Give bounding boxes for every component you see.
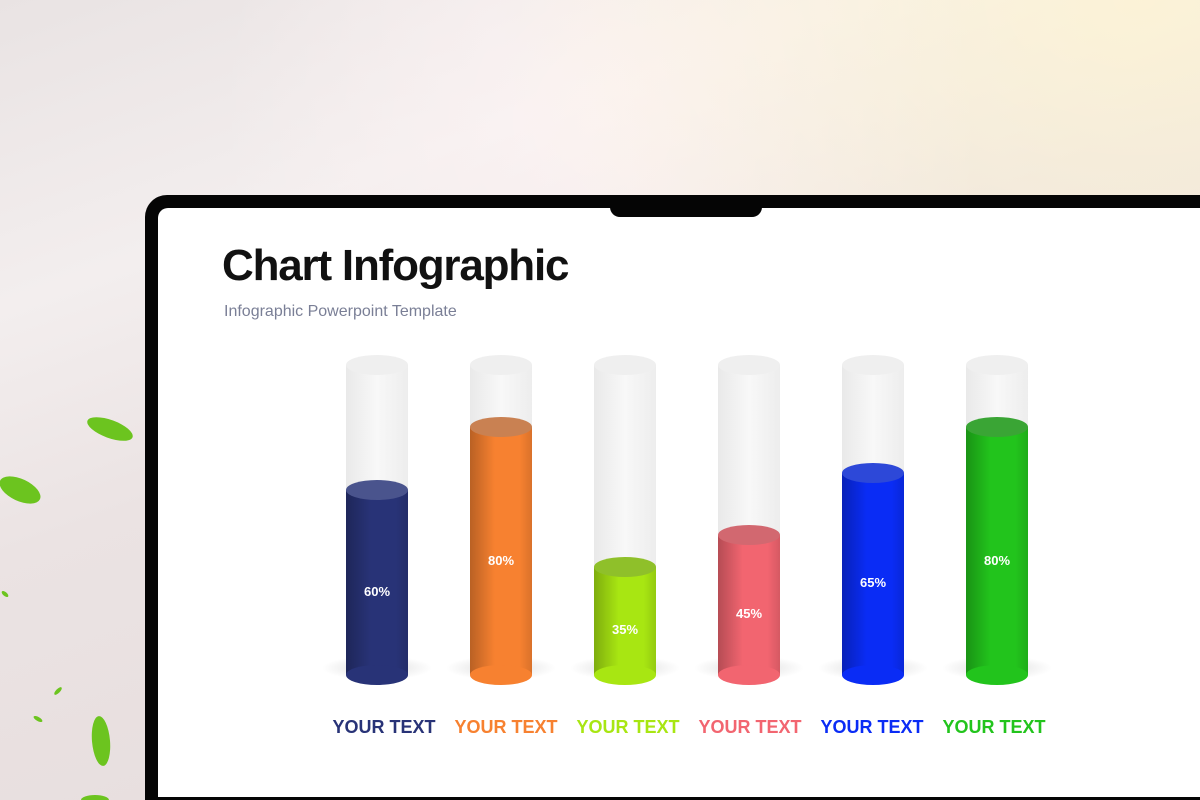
bar chart [332, 355, 1046, 737]
title: Chart Infographic [222, 241, 568, 290]
leaves [0, 417, 133, 800]
bar 6: 80%: 80% [984, 553, 1010, 568]
laptop screen [158, 208, 1200, 797]
labels: YOUR TEXT [698, 717, 802, 737]
bar 6: 80% [942, 355, 1052, 685]
bar 2: 80% [446, 355, 556, 685]
camera notch [610, 206, 762, 217]
bar 3: 35%: 35% [612, 622, 638, 637]
labels: YOUR TEXT [576, 717, 680, 737]
bar 4: 45%: 45% [736, 606, 762, 621]
labels: YOUR TEXT [332, 717, 436, 737]
bar 1: 60% [322, 355, 432, 685]
labels: YOUR TEXT [454, 717, 558, 737]
bar 2: 80%: 80% [488, 553, 514, 568]
bar 1: 60%: 60% [364, 584, 390, 599]
bar 5: 65% [818, 355, 928, 685]
bar 3: 35% [570, 355, 680, 685]
bar 4: 45% [694, 355, 804, 685]
laptop frame [145, 195, 1200, 800]
labels [332, 717, 1046, 737]
labels: YOUR TEXT [942, 717, 1046, 737]
subtitle: Infographic Powerpoint Template [224, 303, 457, 320]
bar 5: 65%: 65% [860, 575, 886, 590]
labels: YOUR TEXT [820, 717, 924, 737]
